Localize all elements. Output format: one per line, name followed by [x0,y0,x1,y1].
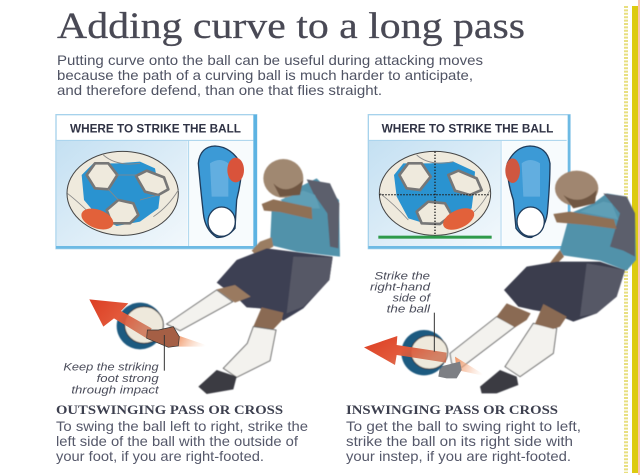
intro text: and therefore defend, than one that flies straight. [57,82,382,98]
intro text: because the path of a curving ball is much harder to anticipate, [57,67,473,83]
icon: boot with strike zone [198,146,244,237]
player figure [450,171,636,393]
callout: strike the right-hand side [370,270,431,315]
illustration: outswinging pass [56,115,340,396]
icon: boot with strike zone [505,146,550,237]
text block: outswinging pass: OUTSWINGING PASS OR CROSS [56,402,283,417]
callout: strike the right-hand side: right-hand [370,281,431,293]
right edge stripe [626,0,640,475]
intro text [57,52,483,98]
callout: strike the right-hand side: Strike the [374,270,430,282]
callout line [433,313,436,352]
text block: inswinging pass [346,402,581,464]
text block: inswinging pass: your instep, if you are right-footed. [346,449,571,464]
icon: football with guides [378,151,492,239]
title: Adding curve to a long pass [57,6,525,47]
callout: keep the striking foot strong: Keep the striking [63,362,160,374]
callout: keep the striking foot strong: through impact [71,384,160,396]
arrow: ball direction [89,299,152,338]
callout: keep the striking foot strong: foot strong [97,373,160,385]
text block: outswinging pass: your foot, if you are right-footed. [56,449,264,464]
text block: outswinging pass: To swing the ball left to right, strike the [56,419,308,434]
panel: where to strike the ball (left) [56,115,257,249]
callout: strike the right-hand side: the ball [387,303,431,315]
strike trail [455,357,487,377]
callout: keep the striking foot strong [63,362,160,396]
text block: inswinging pass: strike the ball on its right side with [346,434,573,449]
ball at impact [401,330,448,375]
strike trail [177,335,211,347]
text block: inswinging pass: INSWINGING PASS OR CROSS [346,402,558,417]
text block: outswinging pass: left side of the ball with the outside of [56,434,298,449]
callout line [163,335,166,371]
intro text: Putting curve onto the ball can be useful during attacking moves [57,52,483,68]
panel heading: WHERE TO STRIKE THE BALL [382,121,553,135]
player figure [167,159,340,394]
text block: inswinging pass: To get the ball to swing right to left, [346,419,581,434]
text block: outswinging pass [56,402,308,464]
illustration: inswinging pass [364,115,636,393]
panel heading: WHERE TO STRIKE THE BALL [70,121,241,135]
panel: where to strike the ball (right) [368,115,570,249]
ball at impact [117,303,163,349]
arrow: ball direction [364,336,447,365]
striking foot [147,327,179,347]
striking foot [438,362,462,378]
callout: strike the right-hand side: side of [393,292,431,304]
icon: football with strike zone [67,151,178,235]
